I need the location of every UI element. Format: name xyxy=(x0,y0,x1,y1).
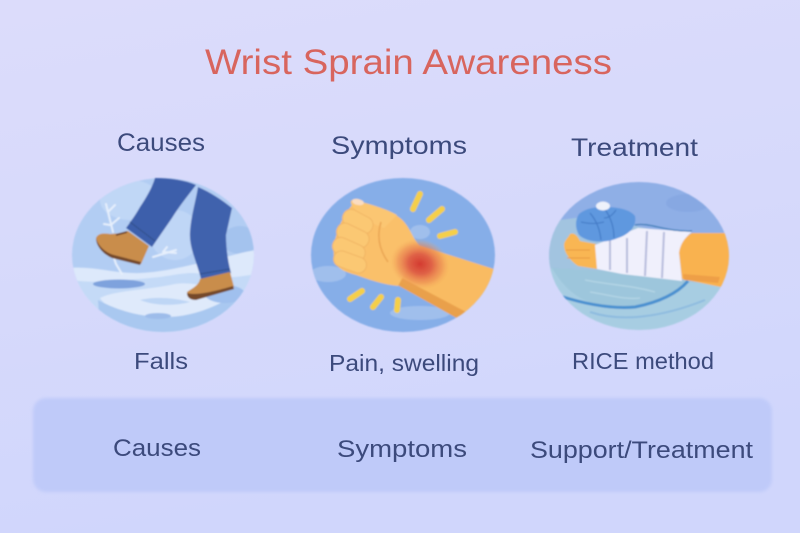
heading: treatment: Treatment xyxy=(571,134,698,162)
rear leg jeans xyxy=(190,187,232,279)
palm crease xyxy=(379,222,388,262)
panel: summary bar xyxy=(33,398,772,492)
pain rays xyxy=(350,194,455,310)
ice pack xyxy=(576,207,635,242)
summary: causes: Causes xyxy=(113,435,201,462)
pillow xyxy=(554,269,684,306)
puddle xyxy=(93,280,145,288)
pool under rear boot xyxy=(205,285,245,303)
illustration: wrist bandage and ice pack xyxy=(545,180,735,335)
label: falls: Falls xyxy=(134,348,188,374)
fingers xyxy=(330,206,376,275)
illustration: injured wrist xyxy=(310,178,497,332)
front boot xyxy=(96,231,149,264)
bruise xyxy=(385,232,455,296)
forearm xyxy=(679,233,735,290)
twig marks xyxy=(104,204,176,274)
thumb xyxy=(351,200,397,228)
snow ground xyxy=(73,250,254,282)
heading: symptoms: Symptoms xyxy=(331,132,467,160)
ice pack cap xyxy=(596,202,610,210)
thumbnail xyxy=(352,198,364,206)
fist xyxy=(334,203,420,286)
bandage xyxy=(595,228,692,281)
front leg jeans xyxy=(126,178,196,247)
rear boot xyxy=(187,272,234,298)
forearm xyxy=(402,245,494,313)
illustration: falling on slippery ground xyxy=(70,175,260,340)
title: Wrist Sprain Awareness xyxy=(205,43,612,82)
summary: symptoms: Symptoms xyxy=(337,436,467,463)
label: pain, swelling: Pain, swelling xyxy=(329,350,479,376)
ice pack strap xyxy=(635,224,692,231)
summary: support and treatment: Support/Treatment xyxy=(530,437,753,464)
label: rice method: RICE method xyxy=(572,348,714,374)
heading: causes: Causes xyxy=(117,129,205,157)
hand xyxy=(564,233,597,269)
